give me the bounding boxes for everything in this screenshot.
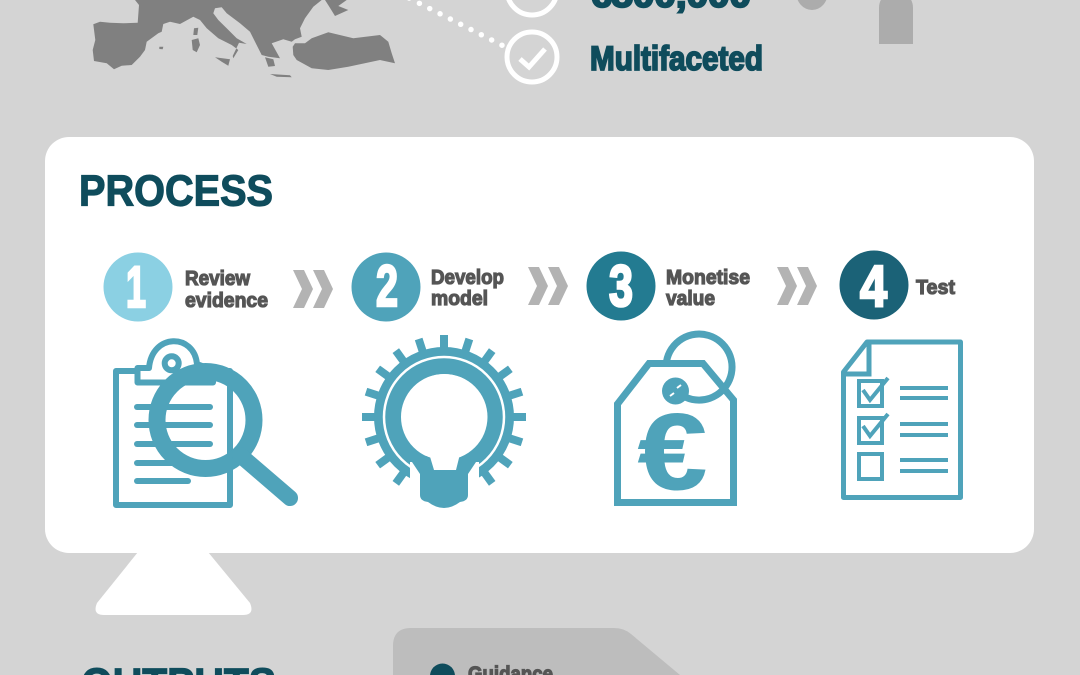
- monitor screen: [45, 137, 1034, 553]
- step 3: [586, 252, 750, 320]
- step 4: [840, 250, 955, 320]
- dotted connector: [409, 0, 504, 46]
- step 2: model: [431, 287, 488, 310]
- icon: clipboard and magnifier: [116, 341, 290, 505]
- step 3: Monetise: [666, 266, 750, 289]
- icon: euro price tag: [618, 334, 734, 512]
- arrow: step 1 to 2: [293, 270, 333, 308]
- step 1: 1: [126, 255, 146, 320]
- step 3: 3: [609, 254, 633, 319]
- map of southern Europe: [93, 0, 395, 77]
- step 2: Develop: [431, 266, 504, 289]
- check icon: multifaceted: [507, 32, 557, 82]
- step 2: 2: [376, 254, 398, 319]
- grey figure: head: [796, 0, 828, 10]
- panel: process monitor: [45, 137, 1034, 615]
- panel: outputs card: [393, 628, 680, 675]
- output number badge: [430, 664, 455, 675]
- step 1: evidence: [185, 289, 268, 312]
- heading: PROCESS: PROCESS: [79, 166, 273, 216]
- label: Multifaceted: Multifaceted: [590, 40, 763, 78]
- arrow: step 2 to 3: [528, 267, 568, 305]
- step 1: Review: [185, 267, 250, 290]
- arrow: step 3 to 4: [777, 267, 817, 305]
- check icon: upper: [507, 0, 557, 15]
- step 4: Test: [916, 276, 955, 299]
- icon: euro price tag: €: [638, 391, 707, 512]
- grey figure: body: [879, 0, 913, 44]
- monitor stand: [96, 552, 251, 615]
- icon: lightbulb gear: [362, 335, 526, 508]
- step 1: [104, 252, 268, 322]
- step 2: [352, 252, 504, 322]
- icon: checklist document: [844, 342, 960, 498]
- step 3: value: [666, 287, 715, 310]
- step 4: 4: [860, 254, 887, 319]
